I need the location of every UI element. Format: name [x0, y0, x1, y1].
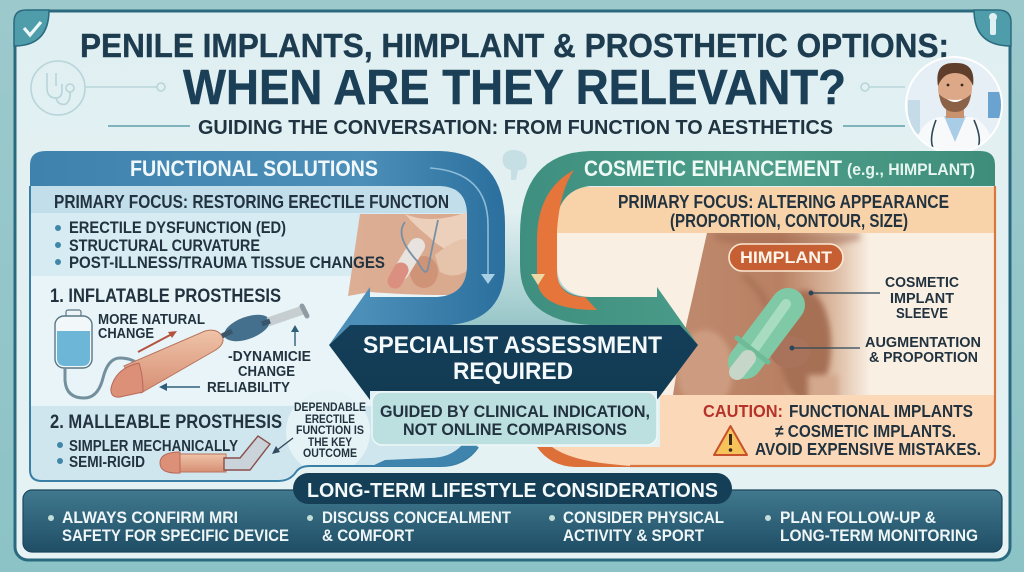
tube	[65, 358, 137, 398]
central arrow	[329, 325, 698, 400]
tip	[111, 363, 143, 397]
icon: brain	[503, 150, 527, 180]
item: follow-up	[765, 509, 978, 545]
item: MRI safety: ALWAYS CONFIRM MRI	[62, 509, 238, 527]
caution text: ≠ COSMETIC IMPLANTS.	[775, 421, 956, 441]
item: MRI safety: SAFETY FOR SPECIFIC DEVICE	[62, 527, 289, 545]
callout: cosmetic implant sleeve: IMPLANT	[890, 291, 954, 307]
item: MRI safety	[48, 509, 289, 545]
himplant pill: HIMPLANT	[740, 248, 833, 267]
central note box: NOT ONLINE COMPARISONS	[403, 421, 627, 439]
panel: lifestyle considerations	[23, 473, 1002, 552]
arrow to malleable	[272, 438, 293, 454]
outcome note: ERECTILE	[305, 414, 355, 426]
functional heading: FUNCTIONAL SOLUTIONS	[130, 156, 378, 181]
malleable list: SEMI-RIGID	[69, 454, 145, 471]
diagram: malleable prosthesis	[160, 436, 270, 473]
caution text: FUNCTIONAL IMPLANTS	[789, 401, 973, 421]
cylinder	[124, 330, 223, 393]
arrows	[138, 331, 177, 352]
item: follow-up: PLAN FOLLOW-UP &	[780, 509, 936, 527]
item: concealment: & COMFORT	[322, 527, 414, 545]
outcome note: THE KEY	[308, 437, 352, 449]
indication list	[55, 218, 385, 272]
panel background strips	[30, 186, 480, 486]
pump	[221, 309, 273, 347]
caution text	[703, 401, 981, 459]
icon: top right badge	[974, 10, 1011, 46]
cosmetic heading: COSMETIC ENHANCEMENT	[584, 156, 842, 181]
lower curved band	[372, 445, 478, 466]
subtitle rule left	[108, 125, 190, 127]
callout: cosmetic implant sleeve: SLEEVE	[896, 306, 948, 322]
title: PENILE IMPLANTS, HIMPLANT & PROSTHETIC OPTIONS:	[80, 27, 949, 64]
item: activity: CONSIDER PHYSICAL	[563, 509, 724, 527]
outcome note: DEPENDABLE	[294, 402, 366, 414]
himplant pill	[729, 244, 843, 271]
title: WHEN ARE THEY RELEVANT?	[183, 61, 846, 115]
subtitle: GUIDING THE CONVERSATION: FROM FUNCTION TO AESTHETICS	[198, 117, 833, 139]
callout: augmentation and proportion: AUGMENTATION	[865, 335, 981, 351]
inflatable labels: RELIABILITY	[207, 380, 290, 396]
icon: check badge	[14, 10, 49, 46]
implant sleeve	[745, 305, 788, 362]
inflatable labels	[98, 312, 311, 396]
green band and arrow	[520, 151, 995, 345]
diagram: inflatable prosthesis	[55, 306, 307, 398]
outcome note: OUTCOME	[303, 448, 357, 460]
cosmetic primary focus: PRIMARY FOCUS: ALTERING APPEARANCE	[618, 192, 949, 212]
subtitle rule right	[843, 125, 905, 127]
malleable list: SIMPLER MECHANICALLY	[69, 438, 239, 455]
outcome note	[294, 402, 366, 460]
title	[80, 27, 949, 115]
icon: stethoscope	[31, 61, 905, 115]
central heading	[363, 332, 662, 385]
cosmetic heading: (e.g., HIMPLANT)	[847, 160, 975, 179]
primary focus: PRIMARY FOCUS: RESTORING ERECTILE FUNCTION	[54, 191, 449, 212]
inflatable labels: CHANGE	[238, 364, 295, 380]
central heading: SPECIALIST ASSESSMENT	[363, 332, 662, 359]
callout: augmentation and proportion	[790, 335, 981, 366]
photo: functional implant schematic	[348, 212, 468, 296]
icon: warning triangle	[714, 426, 747, 455]
panel outline	[630, 186, 995, 466]
malleable list	[57, 438, 239, 471]
photo: cosmetic implant schematic	[673, 233, 866, 395]
inflatable heading: 1. INFLATABLE PROSTHESIS	[50, 286, 281, 307]
outcome note: FUNCTION IS	[296, 425, 364, 437]
central note box: GUIDED BY CLINICAL INDICATION,	[380, 403, 650, 421]
centre backdrop	[440, 210, 600, 326]
reservoir	[55, 310, 92, 368]
panel: cosmetic enhancement	[520, 151, 1000, 470]
cosmetic primary focus: (PROPORTION, CONTOUR, SIZE)	[670, 211, 908, 231]
indication list: ERECTILE DYSFUNCTION (ED)	[69, 218, 286, 237]
doctor portrait	[905, 56, 1003, 154]
item: activity: ACTIVITY & SPORT	[563, 527, 704, 545]
cosmetic primary focus	[618, 192, 949, 231]
callout: cosmetic implant sleeve: COSMETIC	[885, 275, 960, 291]
callout: augmentation and proportion: & PROPORTION	[869, 350, 978, 366]
central heading: REQUIRED	[453, 358, 573, 385]
item: follow-up: LONG-TERM MONITORING	[780, 527, 978, 545]
band highlight arrow	[430, 168, 495, 284]
panel background strips	[530, 187, 1000, 470]
inflatable labels: CHANGE	[98, 326, 154, 342]
panel outline	[30, 186, 478, 481]
callout: cosmetic implant sleeve	[808, 275, 960, 322]
caution text: AVOID EXPENSIVE MISTAKES.	[755, 439, 981, 459]
header band and arrow	[30, 151, 505, 345]
indication list: POST-ILLNESS/TRAUMA TISSUE CHANGES	[69, 253, 385, 272]
inflatable labels: -DYNAMICIE	[228, 349, 311, 365]
lower orange curve	[537, 447, 640, 467]
caution text: CAUTION:	[703, 401, 783, 421]
item: concealment	[307, 509, 511, 545]
indication list: STRUCTURAL CURVATURE	[69, 236, 260, 255]
metal handle	[268, 310, 303, 322]
orange inner arrow	[531, 170, 597, 310]
inflatable labels: MORE NATURAL	[98, 312, 205, 328]
panel: functional solutions	[30, 151, 505, 486]
central note box	[372, 392, 657, 445]
item: concealment: DISCUSS CONCEALMENT	[322, 509, 511, 527]
item: activity	[549, 509, 724, 545]
lifestyle heading: LONG-TERM LIFESTYLE CONSIDERATIONS	[307, 479, 718, 502]
malleable heading: 2. MALLEABLE PROSTHESIS	[50, 412, 282, 433]
